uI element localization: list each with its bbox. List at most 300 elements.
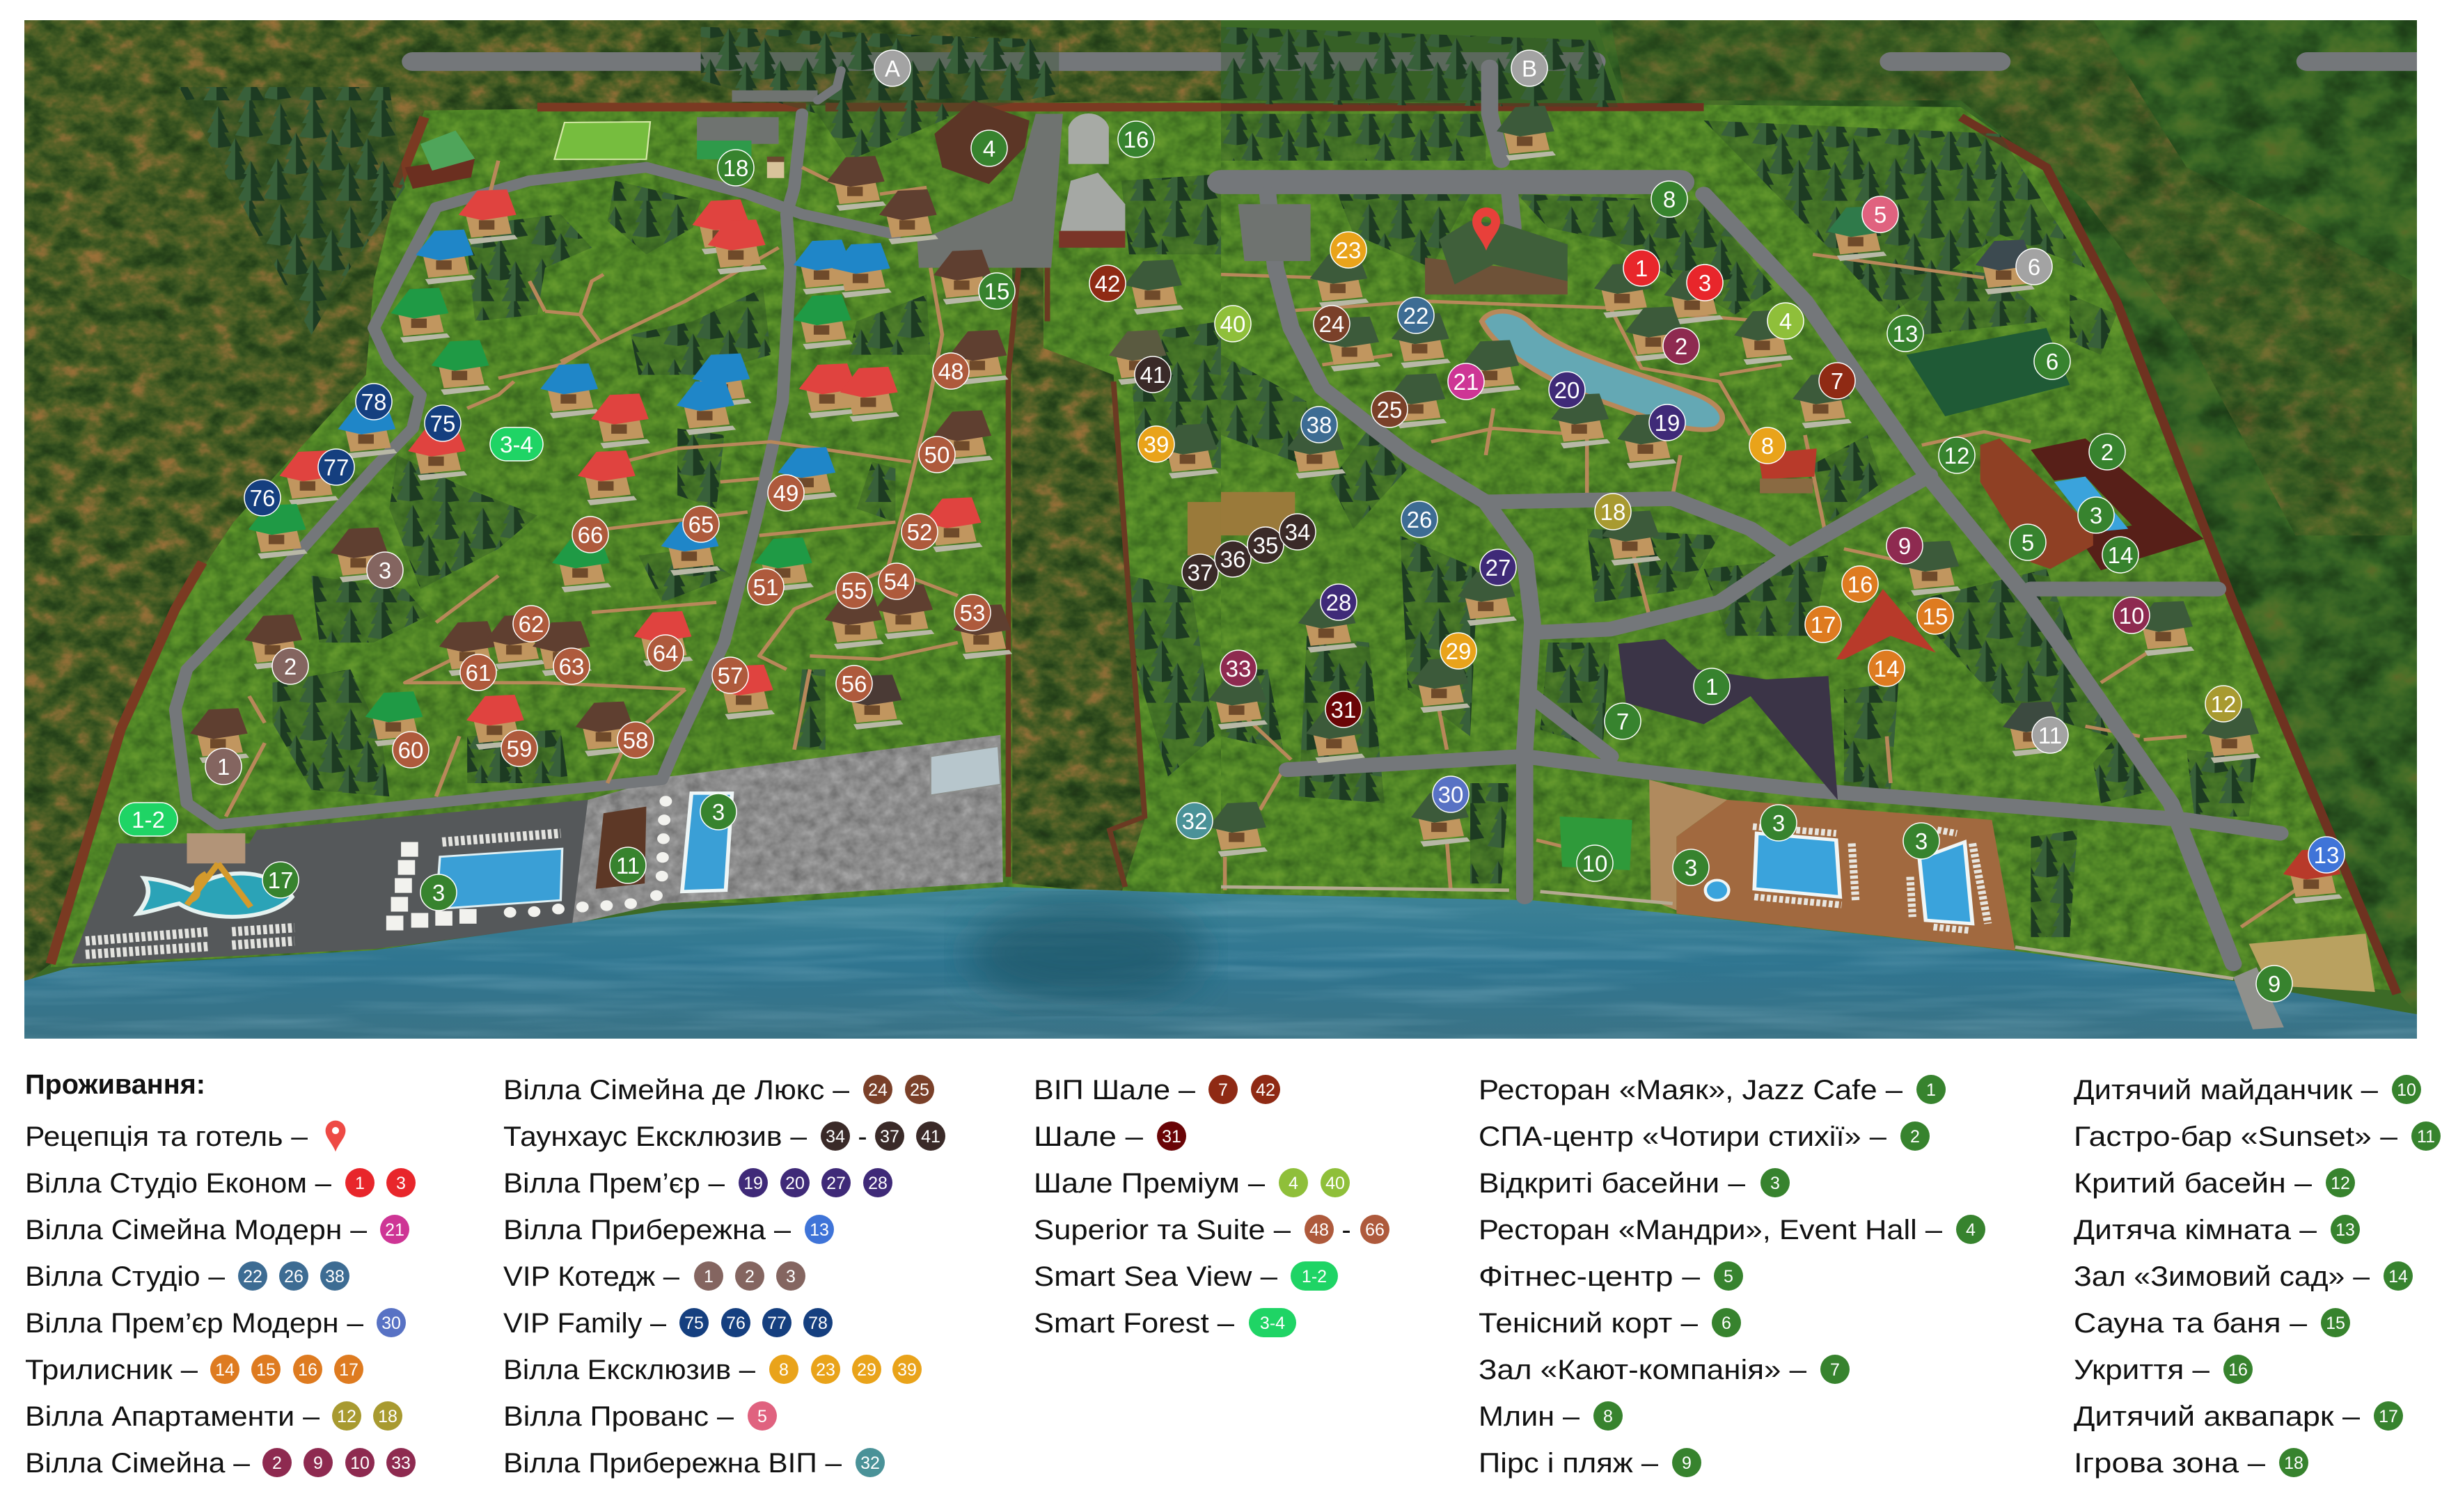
reception pin <box>1472 207 1500 251</box>
marker 1 red <box>1623 250 1660 286</box>
tree clusters west <box>179 26 1221 796</box>
row coastal VIP: 32 <box>860 1454 880 1473</box>
marker 9 wine: 9 <box>1898 533 1911 559</box>
row outdoor pools: 3 <box>1770 1174 1780 1193</box>
legend column: accommodation 1 <box>25 1069 416 1479</box>
road to gate A <box>818 70 841 100</box>
marker 37 <box>1182 554 1218 590</box>
row VIP family: 78 <box>808 1314 828 1333</box>
marker 2 cottage: 2 <box>284 654 297 679</box>
row Mayak: 1 <box>1926 1080 1936 1100</box>
marker 6 tennis <box>2034 343 2070 379</box>
row townhouse: Таунхаус Ексклюзив – <box>503 1121 808 1152</box>
marker 36 <box>1215 541 1251 577</box>
row VIP family: 77 <box>767 1314 787 1333</box>
marker 10 wine: 10 <box>2119 603 2144 629</box>
row mill: Млин – <box>1479 1401 1580 1432</box>
marker 1 red: 1 <box>1635 255 1648 281</box>
marker 55: 55 <box>842 578 867 604</box>
marker 66: 66 <box>578 522 603 548</box>
marker 4 light <box>1767 303 1804 339</box>
marker 12 olive: 12 <box>2211 691 2236 717</box>
marker 8 amber <box>1749 427 1786 464</box>
marker 13 blue: 13 <box>2314 842 2339 868</box>
central tree strip <box>1012 268 1144 894</box>
marker 52 <box>901 514 938 550</box>
marker 40 <box>1215 306 1251 342</box>
marker 36: 36 <box>1220 546 1245 572</box>
houses east <box>1208 106 2342 904</box>
row superior: 66 <box>1365 1220 1385 1240</box>
row premier modern: Вілла Прем’єр Модерн – <box>25 1308 364 1339</box>
marker 3 red: 3 <box>1699 270 1711 296</box>
marker 10 wine <box>2113 597 2150 633</box>
marker 21 <box>1448 363 1484 400</box>
marker 54 <box>879 563 915 599</box>
marker 64 <box>647 635 684 671</box>
row cabin hall: 7 <box>1830 1360 1840 1380</box>
row sauna: 15 <box>2326 1314 2345 1333</box>
spa building <box>1980 439 2204 570</box>
row family deluxe: 25 <box>910 1080 929 1100</box>
marker 23 <box>1330 232 1366 268</box>
row kids room: Дитяча кімната – <box>2074 1215 2317 1245</box>
marker 62 <box>513 606 549 642</box>
marker 51: 51 <box>753 574 778 600</box>
row townhouse: 34 <box>826 1127 845 1147</box>
marker 39: 39 <box>1144 432 1169 457</box>
marker 3 deck: 3 <box>1772 810 1785 836</box>
marker 6 tennis: 6 <box>2046 349 2058 375</box>
left side border fix so reference white margin stays <box>119 50 2345 1002</box>
row premier: 19 <box>743 1174 763 1193</box>
marker 25: 25 <box>1377 397 1402 423</box>
marker 7: 7 <box>1831 368 1843 394</box>
marker 3 deck <box>1760 805 1797 841</box>
water slide <box>187 833 251 907</box>
row exclusive: 8 <box>779 1360 789 1380</box>
marker 51 <box>748 569 784 605</box>
row reception: Рецепція та готель – <box>25 1121 308 1152</box>
marker 24 <box>1314 306 1350 342</box>
marker 3 pool: 3 <box>432 880 445 906</box>
marker 2 wine <box>1663 328 1699 364</box>
row family modern: 21 <box>385 1220 404 1240</box>
row VIP chalet <box>1034 1075 1280 1105</box>
marker 24: 24 <box>1319 311 1344 337</box>
row studio: Вілла Студіо – <box>25 1261 226 1292</box>
row Mandry: Ресторан «Мандри», Event Hall – <box>1479 1215 1943 1245</box>
pill 1-2: 1-2 <box>132 807 165 833</box>
sunbeds east <box>1753 826 1988 930</box>
row family modern: Вілла Сімейна Модерн – <box>25 1215 368 1245</box>
marker 41: 41 <box>1140 362 1165 388</box>
row VIP family: 75 <box>684 1314 704 1333</box>
row chalet premium: Шале Преміум – <box>1034 1168 1266 1199</box>
marker 40: 40 <box>1220 311 1245 337</box>
row superior <box>1034 1215 1389 1245</box>
round jacuzzi <box>1706 880 1728 900</box>
long pool <box>1919 842 1972 924</box>
row apartments: 18 <box>378 1407 397 1426</box>
row superior: 48 <box>1309 1220 1329 1240</box>
row gastro bar: Гастро-бар «Sunset» – <box>2074 1121 2398 1152</box>
marker 29: 29 <box>1446 638 1471 664</box>
panel: resort map <box>24 20 2418 1039</box>
outdoor pool narrow <box>682 793 732 892</box>
parking and plaza <box>697 90 1063 268</box>
row studio econom: 3 <box>396 1174 406 1193</box>
marker 63: 63 <box>559 654 584 679</box>
row tennis: 6 <box>1722 1314 1731 1333</box>
marker 22 <box>1398 297 1434 333</box>
marker 1 restaurant: 1 <box>1706 674 1718 700</box>
marker 18 <box>718 150 754 186</box>
marker 78: 78 <box>361 389 386 415</box>
row mill <box>1479 1401 1623 1432</box>
marker 56: 56 <box>842 671 867 697</box>
row play zone: Ігрова зона – <box>2074 1448 2266 1479</box>
row exclusive: Вілла Ексклюзив – <box>503 1355 756 1385</box>
marker 17 orange: 17 <box>1811 612 1836 638</box>
row outdoor pools: Відкриті басейни – <box>1479 1168 1746 1199</box>
sports field <box>554 122 650 159</box>
marker 3 jacuzzi: 3 <box>1685 855 1697 881</box>
marker 2 spa: 2 <box>2101 439 2113 465</box>
outdoor pool left <box>436 849 562 909</box>
marker 18: 18 <box>723 155 748 181</box>
row townhouse: 37 <box>880 1127 899 1147</box>
row chalet: 31 <box>1162 1127 1181 1147</box>
tennis hall <box>1906 328 2070 416</box>
row forest: Smart Forest – <box>1034 1308 1235 1339</box>
marker 21: 21 <box>1454 369 1479 395</box>
bar building 11 <box>596 807 646 889</box>
marker 48: 48 <box>938 359 963 384</box>
marker 3 jacuzzi <box>1673 849 1709 885</box>
row VIP cottage: 2 <box>745 1267 755 1286</box>
marker 61: 61 <box>466 660 491 686</box>
row winter garden: 14 <box>2388 1267 2408 1286</box>
marker 64: 64 <box>653 640 678 666</box>
west pine forest <box>24 20 1221 984</box>
marker 76 <box>244 480 281 516</box>
row chalet premium: 4 <box>1289 1174 1298 1193</box>
row VIP chalet: 42 <box>1256 1080 1275 1100</box>
marker 61 <box>460 654 496 691</box>
marker 42: 42 <box>1095 271 1120 297</box>
row VIP chalet: 7 <box>1218 1080 1228 1100</box>
marker 49: 49 <box>773 480 798 506</box>
marker 13 blue <box>2308 837 2345 873</box>
marker 7 green: 7 <box>1616 709 1629 734</box>
row studio: 38 <box>325 1267 345 1286</box>
row play zone: 18 <box>2284 1454 2303 1473</box>
pavilion on concrete <box>931 746 1000 795</box>
marker 1 cottage <box>205 748 242 785</box>
marker 65: 65 <box>688 512 714 537</box>
marker 2 cottage <box>272 648 308 684</box>
row shamrock: 16 <box>298 1360 317 1380</box>
row studio <box>25 1261 349 1292</box>
marker 3 deck east: 3 <box>1915 828 1928 854</box>
row indoor pool: Критий басейн – <box>2074 1168 2313 1199</box>
row apartments: 12 <box>337 1407 356 1426</box>
north road east <box>1221 52 2418 71</box>
marker 9 pier: 9 <box>2268 971 2280 997</box>
marker 35: 35 <box>1253 533 1278 558</box>
marker 34 <box>1279 514 1316 550</box>
building 4 <box>934 100 1030 184</box>
row studio: 22 <box>243 1267 262 1286</box>
row premier: 20 <box>785 1174 805 1193</box>
map base <box>24 20 2417 1039</box>
row winter garden: Зал «Зимовий сад» – <box>2074 1261 2370 1292</box>
concrete plaza <box>569 735 1003 925</box>
marker 59: 59 <box>507 736 532 762</box>
gate B: B <box>1522 56 1537 81</box>
tree clusters east <box>1221 26 2257 937</box>
marker 1 cottage: 1 <box>217 754 230 780</box>
marker 77 <box>318 449 354 485</box>
marker 75 <box>425 405 461 441</box>
row superior: - <box>1341 1215 1351 1245</box>
marker 29 <box>1440 633 1476 669</box>
shore wall <box>1221 887 2233 979</box>
marker 3 deck east <box>1903 823 1939 859</box>
marker 19: 19 <box>1655 410 1680 436</box>
marker 6 grey: 6 <box>2028 254 2040 280</box>
north road <box>413 52 1221 71</box>
marker 42 <box>1089 265 1126 301</box>
row sea view: Smart Sea View – <box>1034 1261 1278 1292</box>
marker 60: 60 <box>398 737 423 763</box>
row coastal VIP: Вілла Прибережна ВІП – <box>503 1448 842 1479</box>
marker 58 <box>617 722 654 758</box>
umbrellas <box>386 796 672 930</box>
row mill: 8 <box>1603 1407 1613 1426</box>
marker 32: 32 <box>1182 808 1207 834</box>
row shelter <box>2074 1355 2253 1385</box>
marker 50 <box>919 436 955 473</box>
marker 78 <box>356 384 392 420</box>
walking paths west <box>226 161 958 817</box>
marker 58: 58 <box>623 727 648 753</box>
marker 28: 28 <box>1326 590 1351 615</box>
pill 1-2 <box>119 803 178 836</box>
row tennis: Тенісний корт – <box>1479 1308 1699 1339</box>
heading: Проживання: <box>25 1069 205 1100</box>
marker 53: 53 <box>960 600 985 626</box>
row chalet premium <box>1034 1168 1350 1199</box>
row studio econom: 1 <box>355 1174 365 1193</box>
marker 10 playground: 10 <box>1582 851 1607 876</box>
row coastal: 13 <box>810 1220 829 1240</box>
row kids room: 13 <box>2335 1220 2355 1240</box>
marker 10 playground <box>1577 845 1613 881</box>
marker 15 orange: 15 <box>1923 604 1948 629</box>
marker 9 wine <box>1886 528 1923 564</box>
houses west <box>190 156 1219 763</box>
row townhouse: - <box>858 1121 867 1152</box>
marker 20 <box>1549 372 1585 408</box>
marker 12 olive <box>2205 686 2242 722</box>
marker 8 amber: 8 <box>1761 433 1774 459</box>
pill 3-4: 3-4 <box>500 432 533 457</box>
marker 6 grey <box>2016 249 2052 285</box>
conference building <box>1618 639 1838 800</box>
marker 5 provence <box>1862 196 1898 233</box>
marker 18 olive: 18 <box>1600 499 1625 525</box>
marker 27 <box>1480 549 1516 585</box>
marker 4 <box>971 130 1007 166</box>
marker 3 cottage <box>367 552 403 588</box>
marker 4: 4 <box>983 136 995 162</box>
marker 3 spa pool: 3 <box>2090 503 2102 528</box>
pond with tan edge <box>1482 311 1722 430</box>
townhouses right part <box>1221 492 1295 535</box>
dark pool deck <box>72 800 588 964</box>
marker 63 <box>553 648 590 684</box>
row family deluxe: 24 <box>868 1080 888 1100</box>
row family deluxe: Вілла Сімейна де Люкс – <box>503 1075 850 1105</box>
row provence: 5 <box>757 1407 767 1426</box>
row shamrock: 15 <box>256 1360 276 1380</box>
marker 37: 37 <box>1188 560 1213 585</box>
row Mayak: Ресторан «Маяк», Jazz Cafe – <box>1479 1075 1903 1105</box>
row studio: 26 <box>284 1267 304 1286</box>
marker 38: 38 <box>1307 412 1332 438</box>
marker 30 <box>1433 776 1469 812</box>
marker 14 orange <box>1868 650 1905 686</box>
marker 5 fitness <box>2010 524 2046 560</box>
parking top <box>1221 170 1680 195</box>
marker 31: 31 <box>1331 697 1356 723</box>
marker 27: 27 <box>1486 555 1511 581</box>
row townhouse: 41 <box>921 1127 940 1147</box>
sunbeds <box>86 833 560 954</box>
row VIP cottage: VIP Котедж – <box>503 1261 680 1292</box>
marker 28 <box>1321 584 1357 620</box>
lake-side pool <box>1754 833 1840 897</box>
pill 3-4 <box>490 427 543 461</box>
marker 11 grey <box>2032 717 2068 753</box>
row premier <box>503 1168 892 1199</box>
marker 5 provence: 5 <box>1874 202 1886 228</box>
marker 9 pier <box>2256 966 2292 1002</box>
row pier: Пірс і пляж – <box>1479 1448 1659 1479</box>
reception hotel <box>1425 221 1568 294</box>
row superior: Superior та Suite – <box>1034 1215 1291 1245</box>
row family: 33 <box>391 1454 411 1473</box>
row coastal: Вілла Прибережна – <box>503 1215 791 1245</box>
marker 17 orange <box>1805 606 1841 643</box>
marker 7 <box>1819 363 1855 399</box>
row spa: 2 <box>1910 1127 1920 1147</box>
marker 7 green <box>1605 703 1641 739</box>
beach <box>2249 934 2375 992</box>
row gastro bar: 11 <box>2417 1127 2435 1147</box>
fences centre <box>1009 254 1144 887</box>
row chalet <box>1034 1121 1186 1152</box>
row premier: 27 <box>826 1174 846 1193</box>
row family: 9 <box>313 1454 323 1473</box>
gate B <box>1511 50 1547 86</box>
pool deck <box>1676 800 2015 950</box>
row VIP cottage: 1 <box>704 1267 714 1286</box>
marker 8 mill <box>1651 181 1687 217</box>
row Mandry: 4 <box>1966 1220 1976 1240</box>
barn <box>405 130 475 189</box>
marker 57: 57 <box>718 663 743 688</box>
red villa 8 <box>1758 448 1817 494</box>
marker 3 pool narrow <box>700 794 736 830</box>
townhouses left part <box>1188 502 1221 556</box>
marker 18 olive <box>1595 494 1631 530</box>
marker 16 <box>1118 121 1154 157</box>
row aquapark: Дитячий аквапарк – <box>2074 1401 2361 1432</box>
legend column: accommodation 3 <box>1034 1075 1389 1339</box>
row provence: Вілла Прованс – <box>503 1401 734 1432</box>
row forest: 3-4 <box>1260 1314 1285 1333</box>
row townhouse <box>503 1121 945 1152</box>
marker 60 <box>393 732 429 768</box>
marker 17 aquapark: 17 <box>268 867 293 893</box>
marker 59 <box>501 730 537 766</box>
row VIP family: 76 <box>726 1314 746 1333</box>
walking paths east <box>1221 254 2296 927</box>
marker 52: 52 <box>907 519 932 545</box>
gate A: A <box>885 56 900 81</box>
marker 35 <box>1247 527 1284 563</box>
marker 15 <box>979 273 1015 309</box>
row sauna: Сауна та баня – <box>2074 1308 2308 1339</box>
row VIP cottage: 3 <box>786 1267 796 1286</box>
row playground: Дитячий майданчик – <box>2074 1075 2379 1105</box>
marker 17 aquapark <box>262 862 299 898</box>
row studio econom: Вілла Студіо Економ – <box>25 1168 332 1199</box>
map markers <box>119 50 2345 1002</box>
marker 12: 12 <box>1944 443 1969 468</box>
marker 19 <box>1649 404 1685 441</box>
water <box>24 887 2417 1039</box>
marker 48 <box>933 353 969 389</box>
marker 14 green: 14 <box>2108 542 2133 568</box>
marker 56 <box>836 666 872 702</box>
marker 34: 34 <box>1285 519 1310 545</box>
marker 16 orange: 16 <box>1848 572 1873 597</box>
marker 39 <box>1138 426 1174 462</box>
legend column: services 2 <box>2074 1075 2441 1479</box>
resort grass west <box>51 100 1221 967</box>
row premier: Вілла Прем’єр – <box>503 1168 725 1199</box>
north-east forest <box>1595 20 2418 1014</box>
marker 8 mill: 8 <box>1663 187 1676 212</box>
marker 57 <box>712 657 748 693</box>
row VIP family <box>503 1308 833 1339</box>
building 18 <box>697 141 784 178</box>
marker 26 <box>1401 501 1437 537</box>
marker 13 <box>1887 315 1923 352</box>
row sea view: 1-2 <box>1302 1267 1327 1286</box>
marker 3 spa pool <box>2078 497 2114 533</box>
row indoor pool: 12 <box>2331 1174 2350 1193</box>
car park <box>1238 204 1311 261</box>
marker 32 <box>1176 803 1213 839</box>
row shelter: 16 <box>2228 1360 2248 1380</box>
marker 11 bar: 11 <box>616 853 640 879</box>
right half of the scene <box>1208 20 2418 1030</box>
